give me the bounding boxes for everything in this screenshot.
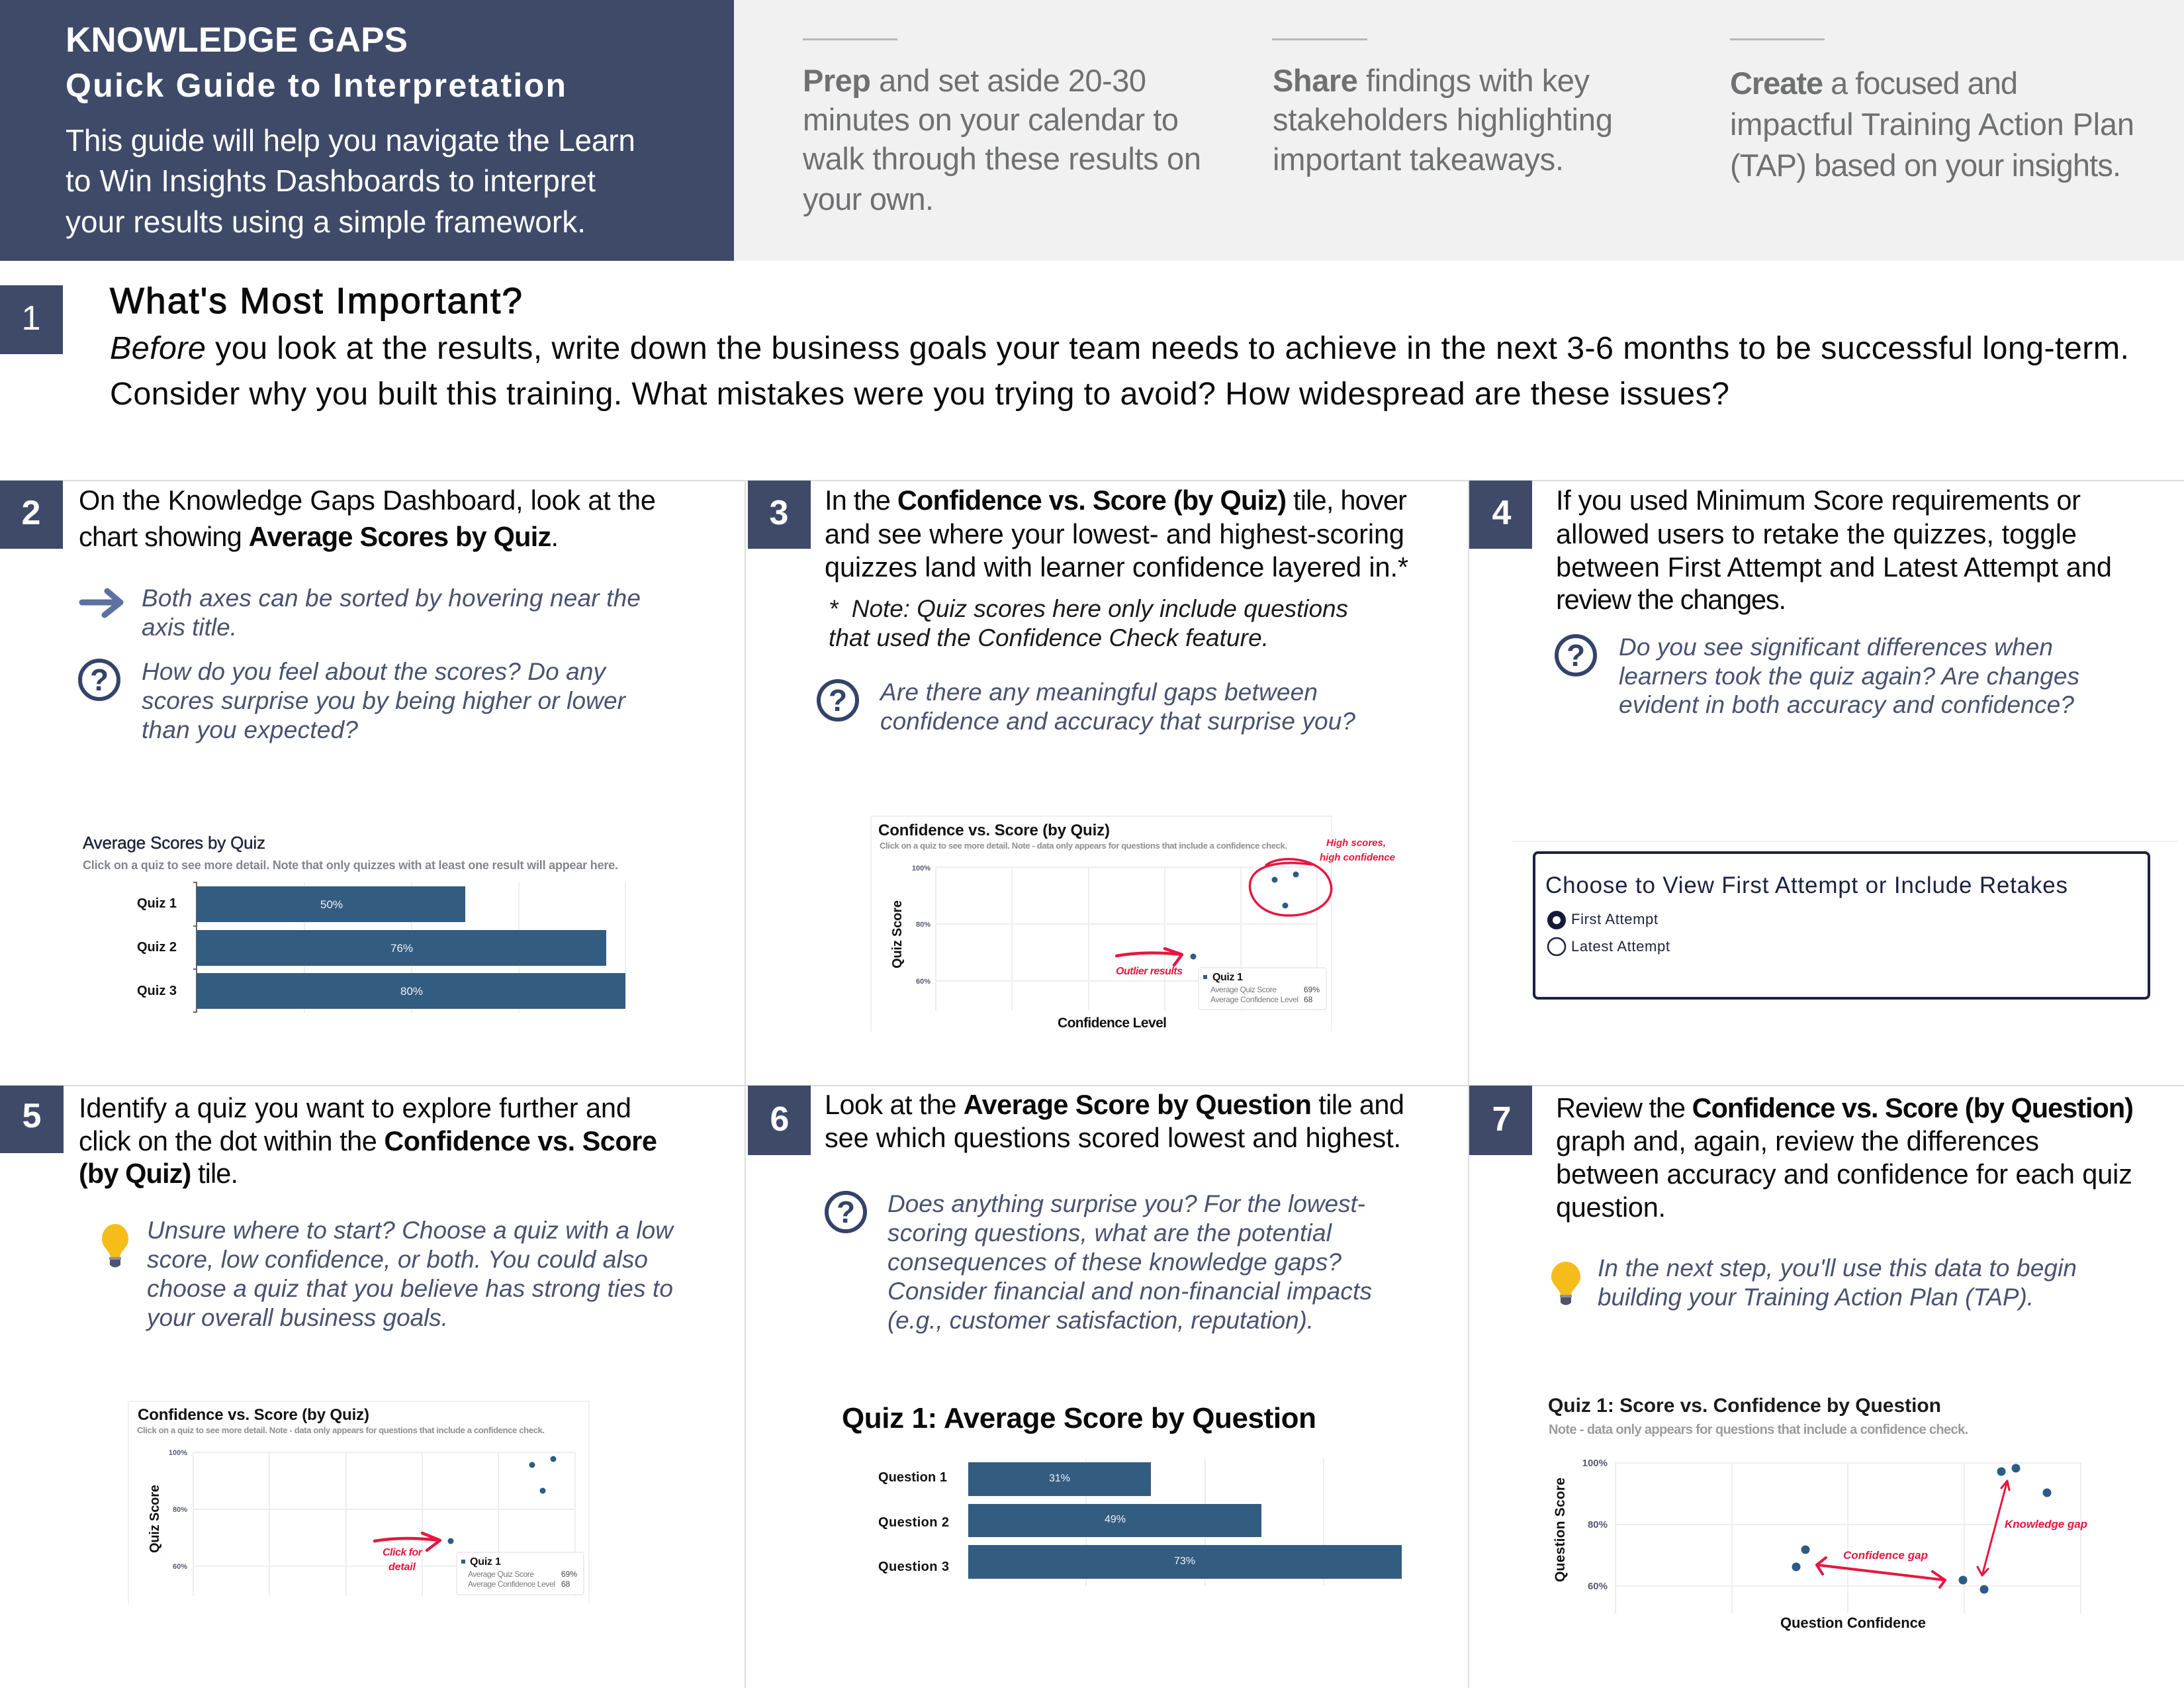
icon: question mark	[80, 661, 118, 699]
scatter chart: click for detail: 68	[561, 1579, 570, 1589]
bar chart: average score by question: Question 3	[878, 1560, 949, 1574]
reflection question: Does anything surprise you? For the lowest-	[887, 1190, 1365, 1217]
scatter chart: click for detail: Average Confidence Level	[468, 1579, 555, 1589]
scatter chart: click for detail: 69%	[561, 1570, 577, 1579]
bar chart: average score by question: Question 2	[878, 1515, 949, 1530]
text block: create	[1730, 38, 2134, 183]
step 5 text: Identify a quiz you want to explore further and	[79, 1092, 631, 1123]
step number 3	[748, 481, 811, 549]
intro text: your results using a simple framework.	[66, 205, 586, 239]
reflection question: than you expected?	[142, 716, 358, 743]
attempt selector widget: Latest Attempt	[1571, 938, 1670, 955]
tip text: score, low confidence, or both. You could also	[147, 1246, 648, 1273]
icon: light bulb	[102, 1224, 128, 1267]
scatter chart: click for detail: Confidence vs. Score (by Quiz)	[138, 1406, 369, 1424]
scatter chart: click for detail: Quiz Score	[148, 1485, 162, 1553]
icon: question mark: ?	[829, 683, 847, 718]
next step note: In the next step, you'll use this data to begin	[1598, 1254, 2077, 1282]
step 7 text: between accuracy and confidence for each quiz	[1556, 1158, 2132, 1190]
scatter chart: click for detail: 60%	[173, 1563, 187, 1571]
reflection question: Do you see significant differences when	[1619, 633, 2053, 661]
panel: step 6	[748, 1086, 1404, 1585]
reflection question: learners took the quiz again? Are changes	[1619, 663, 2079, 690]
panel: step 7	[1469, 1086, 2134, 1631]
scatter chart: score vs confidence by question: Question Score	[1553, 1477, 1568, 1582]
step 3 text: and see where your lowest- and highest-scoring	[825, 518, 1404, 549]
scatter chart: confidence vs score with annotations: 60%	[916, 978, 931, 986]
reflection question: scoring questions, what are the potential	[887, 1219, 1333, 1246]
bar chart: average scores by quiz: 50%	[320, 898, 343, 911]
reflection question: How do you feel about the scores? Do any	[142, 658, 608, 685]
step 7 text	[1556, 1092, 2134, 1223]
panel: step 5	[0, 1086, 674, 1603]
step 5 text: click on the dot within the Confidence vs. Score	[79, 1125, 657, 1156]
reflection question	[887, 1190, 1372, 1334]
bar chart: average scores by quiz: Click on a quiz to see more detail. Note that only quizzes with at least one result will appear here.	[83, 859, 618, 872]
tip text	[145, 1217, 674, 1331]
step 1 text: Consider why you built this training. What mistakes were you trying to avoid? How widespread are these issues?	[110, 376, 1729, 412]
scatter chart: confidence vs score with annotations: 100%	[912, 865, 931, 872]
step number 1: 1	[22, 299, 40, 338]
title: Quick Guide to Interpretation	[66, 67, 566, 104]
scatter chart: confidence vs score with annotations: Quiz Score	[890, 900, 905, 968]
step 5 text: (by Quiz) tile.	[79, 1158, 238, 1189]
icon: question mark: ?	[1567, 638, 1585, 673]
note: * Note: Quiz scores here only include questions	[829, 595, 1348, 622]
text block: prep: minutes on your calendar to	[803, 102, 1179, 137]
icon: question mark: ?	[837, 1195, 855, 1229]
sorting tip	[142, 585, 641, 641]
step 6 text: see which questions scored lowest and highest.	[825, 1122, 1401, 1153]
scatter chart: confidence vs score with annotations: 80%	[916, 921, 931, 929]
scatter chart: confidence vs score with annotations: Average Confidence Level	[1210, 995, 1298, 1004]
bar chart: average scores by quiz: 76%	[390, 942, 413, 955]
icon: question mark: ?	[90, 663, 109, 697]
intro text: This guide will help you navigate the Learn	[66, 123, 635, 158]
scatter chart: click for detail: Average Quiz Score	[468, 1570, 534, 1579]
icon: question mark	[819, 681, 857, 720]
scatter chart: confidence vs score with annotations: Confidence Level	[1058, 1015, 1167, 1031]
step 3 text: quizzes land with learner confidence layered in.*	[825, 551, 1408, 583]
scatter chart: confidence vs score with annotations	[871, 816, 1395, 1031]
step number 6	[748, 1086, 811, 1155]
reflection question: (e.g., customer satisfaction, reputation).	[887, 1307, 1314, 1334]
step number 5	[0, 1086, 64, 1153]
reflection question: Consider financial and non-financial impacts	[887, 1278, 1372, 1305]
step 2 text: chart showing Average Scores by Quiz.	[79, 521, 559, 552]
step 7 text: graph and, again, review the differences	[1556, 1125, 2039, 1156]
panel: step 4	[1469, 481, 2177, 998]
bar chart: average scores by quiz	[83, 833, 625, 1013]
text block: prep: Prep and set aside 20-30	[803, 63, 1146, 98]
icon: light bulb	[1551, 1262, 1580, 1305]
bar chart: average score by question: Quiz 1: Average Score by Question	[842, 1402, 1316, 1434]
panel: prep share create	[734, 0, 2184, 261]
panel: step 3	[748, 481, 1408, 1031]
scatter chart: score vs confidence by question: Knowledge gap	[2005, 1518, 2087, 1530]
bar chart: average scores by quiz: Quiz 2	[137, 940, 177, 955]
scatter chart: confidence vs score with annotations: Outlier results	[1116, 966, 1183, 977]
text block: create: Create a focused and	[1730, 66, 2018, 101]
scatter chart: score vs confidence by question: 100%	[1582, 1458, 1608, 1469]
scatter chart: click for detail: 80%	[173, 1506, 187, 1514]
intro text	[66, 123, 635, 239]
step number 1	[0, 285, 63, 354]
title: KNOWLEDGE GAPS	[66, 21, 408, 60]
scatter chart: score vs confidence by question: Note - data only appears for questions that include a confidence check.	[1549, 1423, 1968, 1437]
scatter chart: score vs confidence by question: 60%	[1588, 1581, 1608, 1592]
step number 4	[1469, 481, 1532, 549]
tip text: choose a quiz that you believe has strong ties to	[147, 1275, 673, 1302]
panel: step 1	[0, 280, 2129, 412]
heading: what's most important: What's Most Important?	[110, 280, 522, 321]
bar chart: average scores by quiz: 80%	[400, 985, 423, 998]
tip text: your overall business goals.	[145, 1304, 448, 1331]
scatter chart: confidence vs score with annotations: 68	[1304, 995, 1313, 1004]
bar chart: average score by question: 49%	[1105, 1514, 1126, 1525]
scatter chart: click for detail: 100%	[169, 1449, 187, 1457]
text block: prep	[802, 38, 1201, 216]
step 1 text: Before you look at the results, write down the business goals your team needs to achieve in the next 3-6 months to be successful long-term.	[110, 330, 2129, 366]
step number 7: 7	[1492, 1100, 1511, 1139]
step 4 text: review the changes.	[1556, 584, 1786, 615]
title	[66, 21, 566, 104]
step number 2: 2	[22, 494, 40, 532]
step number 4: 4	[1492, 494, 1512, 532]
step number 7	[1469, 1086, 1532, 1155]
next step note: building your Training Action Plan (TAP).	[1598, 1284, 2034, 1311]
scatter chart: confidence vs score with annotations: high confidence	[1320, 852, 1395, 863]
scatter chart: confidence vs score with annotations: Click on a quiz to see more detail. Note - data only appears for questions that include a confidence check.	[880, 841, 1287, 851]
icon: question mark	[827, 1193, 865, 1231]
scatter chart: click for detail: Click for	[383, 1547, 423, 1558]
step 1 text	[110, 330, 2129, 412]
scatter chart: score vs confidence by question: 80%	[1588, 1519, 1608, 1530]
scatter chart: click for detail: Click on a quiz to see more detail. Note - data only appears for questions that include a confidence check.	[137, 1425, 545, 1435]
step 7 text: Review the Confidence vs. Score (by Question)	[1556, 1092, 2134, 1123]
attempt selector widget: First Attempt	[1571, 911, 1658, 927]
reflection question: scores surprise you by being higher or lower	[142, 687, 627, 714]
step 2 text: On the Knowledge Gaps Dashboard, look at the	[79, 485, 656, 516]
step 5 text	[79, 1092, 657, 1189]
text block: prep: walk through these results on	[802, 141, 1201, 176]
reflection question: confidence and accuracy that surprise you?	[880, 708, 1355, 735]
bar chart: average scores by quiz: Quiz 1	[137, 896, 177, 911]
reflection question	[1619, 633, 2079, 718]
sorting tip: axis title.	[142, 614, 237, 641]
scatter chart: score vs confidence by question: Question Confidence	[1780, 1615, 1926, 1631]
bar chart: average scores by quiz: Quiz 3	[137, 984, 177, 998]
step 6 text: Look at the Average Score by Question tile and	[825, 1089, 1404, 1120]
reflection question: evident in both accuracy and confidence?	[1619, 691, 2074, 718]
step 4 text: If you used Minimum Score requirements or	[1556, 485, 2081, 516]
note	[829, 595, 1348, 651]
reflection question	[879, 679, 1355, 735]
bar chart: average score by question: 73%	[1174, 1556, 1195, 1567]
scatter chart: click for detail: detail	[388, 1562, 416, 1573]
sorting tip: Both axes can be sorted by hovering near the	[142, 585, 641, 612]
reflection question: Are there any meaningful gaps between	[879, 679, 1318, 706]
step number 3: 3	[770, 494, 788, 532]
scatter chart: score vs confidence by question: Quiz 1: Score vs. Confidence by Question	[1548, 1395, 1941, 1417]
bar chart: average scores by quiz: Average Scores by Quiz	[83, 833, 265, 853]
step number 2	[0, 481, 63, 549]
attempt selector widget: Choose to View First Attempt or Include Retakes	[1545, 872, 2068, 898]
bar chart: average score by question: Question 1	[878, 1470, 947, 1485]
step 4 text	[1556, 485, 2112, 615]
scatter chart: confidence vs score with annotations: High scores,	[1326, 837, 1386, 849]
bar chart: average score by question: 31%	[1049, 1473, 1070, 1484]
note: that used the Confidence Check feature.	[829, 624, 1269, 651]
intro text: to Win Insights Dashboards to interpret	[66, 164, 596, 198]
icon: arrow	[82, 591, 120, 615]
reflection question	[142, 658, 627, 743]
scatter chart: click for detail	[128, 1401, 589, 1603]
reflection question: consequences of these knowledge gaps?	[887, 1248, 1342, 1276]
text block: share: Share findings with key	[1273, 63, 1590, 98]
step 6 text	[825, 1089, 1404, 1153]
attempt selector widget	[1534, 853, 2149, 998]
text block: create: (TAP) based on your insights.	[1730, 148, 2121, 183]
step number 6: 6	[770, 1100, 789, 1139]
step 2 text	[79, 485, 656, 552]
scatter chart: score vs confidence by question	[1548, 1395, 2087, 1631]
step 4 text: between First Attempt and Latest Attempt and	[1556, 551, 2112, 583]
text block: prep: your own.	[803, 181, 934, 216]
icon: question mark	[1557, 636, 1595, 675]
scatter chart: click for detail: Quiz 1	[470, 1556, 501, 1568]
step number 5: 5	[23, 1097, 41, 1135]
scatter chart: confidence vs score with annotations: Average Quiz Score	[1210, 985, 1277, 994]
text block: share: stakeholders highlighting	[1273, 102, 1613, 137]
panel: header intro	[0, 0, 734, 261]
step 3 text: In the Confidence vs. Score (by Quiz) tile, hover	[825, 485, 1407, 516]
scatter chart: confidence vs score with annotations: Quiz 1	[1212, 972, 1243, 983]
scatter chart: confidence vs score with annotations: 69%	[1304, 985, 1320, 994]
step 3 text	[825, 485, 1408, 583]
text block: share	[1272, 38, 1613, 177]
scatter chart: score vs confidence by question: Confidence gap	[1843, 1549, 1928, 1562]
panel: step 2	[0, 481, 656, 1013]
step 7 text: question.	[1556, 1192, 1666, 1223]
step 4 text: allowed users to retake the quizzes, toggle	[1556, 518, 2077, 549]
text block: create: impactful Training Action Plan	[1730, 107, 2134, 142]
tip text: Unsure where to start? Choose a quiz with a low	[147, 1217, 674, 1244]
next step note	[1598, 1254, 2077, 1311]
bar chart: average score by question	[842, 1402, 1402, 1585]
scatter chart: confidence vs score with annotations: Confidence vs. Score (by Quiz)	[878, 821, 1110, 839]
text block: share: important takeaways.	[1273, 142, 1564, 177]
